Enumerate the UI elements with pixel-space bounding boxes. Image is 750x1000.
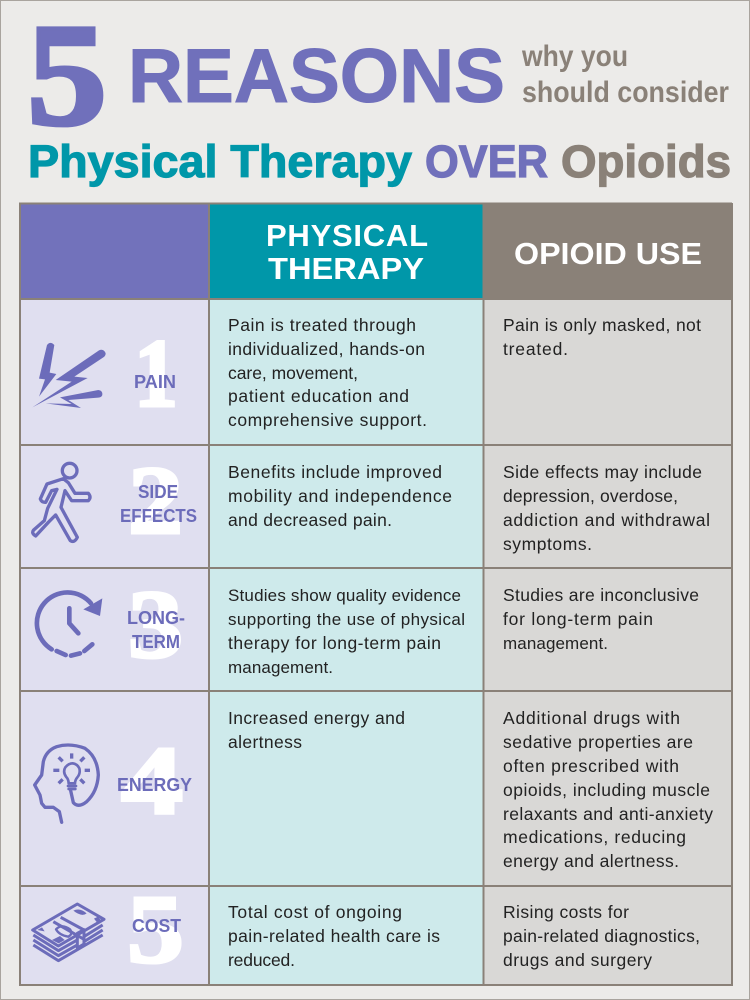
row 4 opioid text: medications, reducing [503,827,686,847]
row 2 opioid text [503,462,710,554]
row 5 opioid text: pain-related diagnostics, [503,926,700,946]
icon: head with light bulb [35,745,98,822]
row 4 physical therapy text [228,708,405,752]
row 1 physical therapy text: individualized, hands-on [228,339,425,359]
row 4 label: ENERGY [117,775,192,795]
row 1 physical therapy text: Pain is treated through [228,315,416,335]
table background cells [19,203,733,986]
row 2 physical therapy text: mobility and independence [228,486,452,506]
row 5 physical therapy text: reduced. [228,950,295,970]
column heading: opioid use: OPIOID USE [514,236,702,271]
row 3 opioid text: for long-term pain [503,609,653,629]
row 3 label: TERM [132,632,180,652]
row 4 opioid text: energy and alertness. [503,851,679,871]
column heading: physical therapy: THERAPY [268,251,424,286]
row 5 physical therapy text: Total cost of ongoing [228,902,402,922]
row 2 physical therapy text [228,462,452,530]
row 5 opioid text [503,902,700,970]
row 3 label: LONG- [127,608,185,628]
title: OVER [425,136,548,187]
icon: clock with arrow [37,592,102,656]
row 1 opioid text: Pain is only masked, not [503,315,701,335]
row 4 opioid text [503,708,713,871]
row 2 label [120,482,197,526]
row 3 physical therapy text: supporting the use of physical [228,610,465,629]
row 2 label: SIDE [138,482,178,502]
row 1 opioid text: treated. [503,339,568,359]
row 2 opioid text: symptoms. [503,534,592,554]
icon: walking person [33,463,90,541]
row 4 opioid text: opioids, including muscle [503,780,710,800]
title [27,0,731,187]
row 3 opioid text: management. [503,634,608,653]
row 5 physical therapy text [228,902,440,970]
row 3 physical therapy text [228,586,465,677]
row 4 number: 4 [121,727,183,835]
row 3 physical therapy text: Studies show quality evidence [228,586,461,605]
row 2 opioid text: depression, overdose, [503,486,678,506]
row 4 physical therapy text: alertness [228,732,302,752]
row 4 opioid text: Additional drugs with [503,708,680,728]
row 1 number: 1 [134,320,178,428]
row 3 opioid text [503,585,699,653]
row 1 physical therapy text: care, movement, [228,363,358,383]
row 5 label: COST [132,916,181,936]
row 2 opioid text: addiction and withdrawal [503,510,710,530]
row 1 label: PAIN [134,372,176,392]
icon: lightning bolts [32,343,106,408]
row 5 opioid text: Rising costs for [503,902,629,922]
row 4 physical therapy text: Increased energy and [228,708,405,728]
title: should consider [522,76,729,109]
title: REASONS [128,34,505,119]
row 2 opioid text: Side effects may include [503,462,702,482]
row 2 physical therapy text: Benefits include improved [228,462,442,482]
row 3 physical therapy text: therapy for long-term pain [228,633,441,653]
row 3 physical therapy text: management. [228,658,333,677]
row 1 physical therapy text: patient education and [228,386,409,406]
column heading: physical therapy: PHYSICAL [266,218,428,253]
title: Opioids [561,136,731,187]
row 4 opioid text: sedative properties are [503,732,693,752]
row 2 number: 2 [128,447,183,555]
row 4 opioid text: relaxants and anti-anxiety [503,804,713,824]
row 2 physical therapy text: and decreased pain. [228,510,392,530]
column heading: physical therapy [266,218,428,286]
row 5 number: 5 [127,876,184,984]
title: why you [521,40,628,73]
row 2 label: EFFECTS [120,506,197,526]
row 1 opioid text [503,315,701,359]
row 3 label [127,608,185,652]
row 3 opioid text: Studies are inconclusive [503,585,699,605]
row 1 physical therapy text [228,315,427,430]
icon: stack of money [33,904,104,961]
row 5 opioid text: drugs and surgery [503,950,652,970]
row 3 number: 3 [128,571,183,679]
title: Physical Therapy [28,136,412,187]
row 5 physical therapy text: pain-related health care is [228,926,440,946]
row 4 opioid text: often prescribed with [503,756,679,776]
row 1 physical therapy text: comprehensive support. [228,410,427,430]
